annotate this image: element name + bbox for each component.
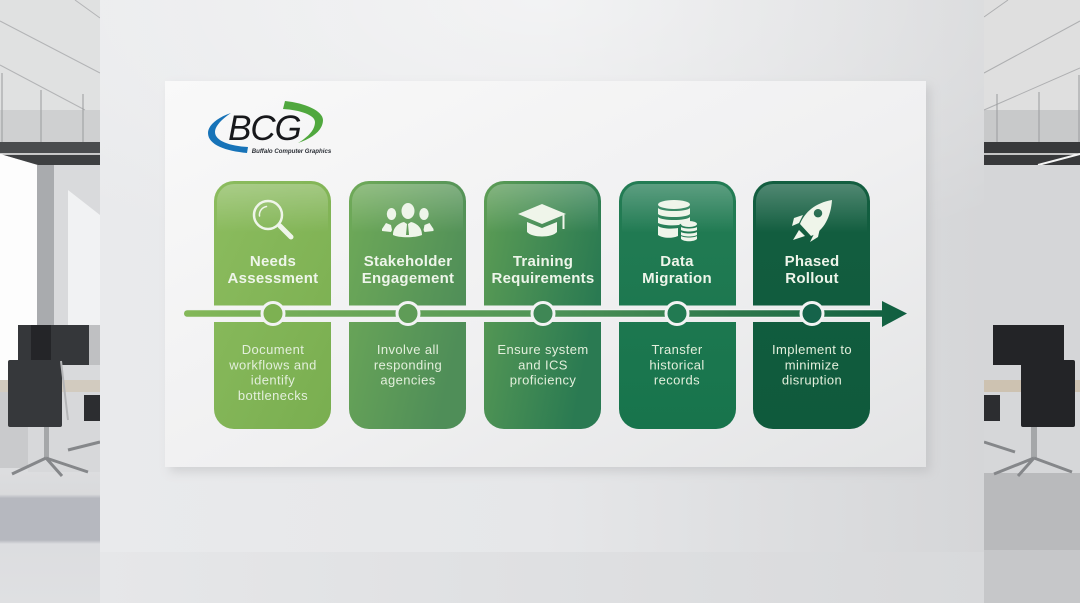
milestone 4 <box>666 302 688 324</box>
heading: Training <box>513 253 573 270</box>
logo swoosh: blue <box>208 113 248 153</box>
description: Document <box>242 342 304 357</box>
logo: BCG <box>208 101 332 155</box>
description: Involve all <box>377 342 439 357</box>
card backgrounds and text <box>214 181 870 429</box>
heading: Rollout <box>785 270 839 287</box>
description: bottlenecks <box>238 388 308 403</box>
description: minimize <box>785 357 839 372</box>
icon: database <box>658 200 697 241</box>
left office room <box>0 0 100 603</box>
milestone 5 <box>801 302 823 324</box>
panel: phased rollout <box>753 181 870 429</box>
description: disruption <box>782 373 842 388</box>
description: Ensure system <box>497 342 589 357</box>
description: records <box>654 373 700 388</box>
panel: needs assessment <box>214 181 331 429</box>
icon: magnifying glass <box>254 201 291 237</box>
icon: people <box>382 203 434 237</box>
logo swoosh: green <box>283 101 323 143</box>
heading: Assessment <box>228 270 318 287</box>
icon: rocket <box>792 200 832 242</box>
heading: Phased <box>785 253 839 270</box>
description: proficiency <box>510 373 576 388</box>
description: historical <box>649 357 705 372</box>
milestone 1 <box>262 302 284 324</box>
panel: white board <box>165 81 930 472</box>
heading: Requirements <box>491 270 595 287</box>
timeline arrow <box>184 301 907 327</box>
icon: graduation cap <box>518 204 566 236</box>
description: agencies <box>380 373 436 388</box>
heading: Stakeholder <box>364 253 452 270</box>
right office room <box>984 0 1080 603</box>
milestone 2 <box>397 302 419 324</box>
description: Transfer <box>651 342 703 357</box>
heading: Data <box>660 253 694 270</box>
heading: Migration <box>642 270 712 287</box>
description: identify <box>251 373 295 388</box>
panel: training requirements <box>484 181 601 429</box>
description: workflows and <box>228 357 317 372</box>
panel: data migration <box>619 181 736 429</box>
panel: stakeholder engagement <box>349 181 466 429</box>
description: Implement to <box>772 342 852 357</box>
logo tagline: Buffalo Computer Graphics <box>252 148 332 155</box>
description: responding <box>374 357 442 372</box>
milestone 3 <box>532 302 554 324</box>
logo letters: BCG <box>228 109 301 148</box>
description: and ICS <box>518 357 568 372</box>
heading: Needs <box>250 253 296 270</box>
heading: Engagement <box>362 270 454 287</box>
